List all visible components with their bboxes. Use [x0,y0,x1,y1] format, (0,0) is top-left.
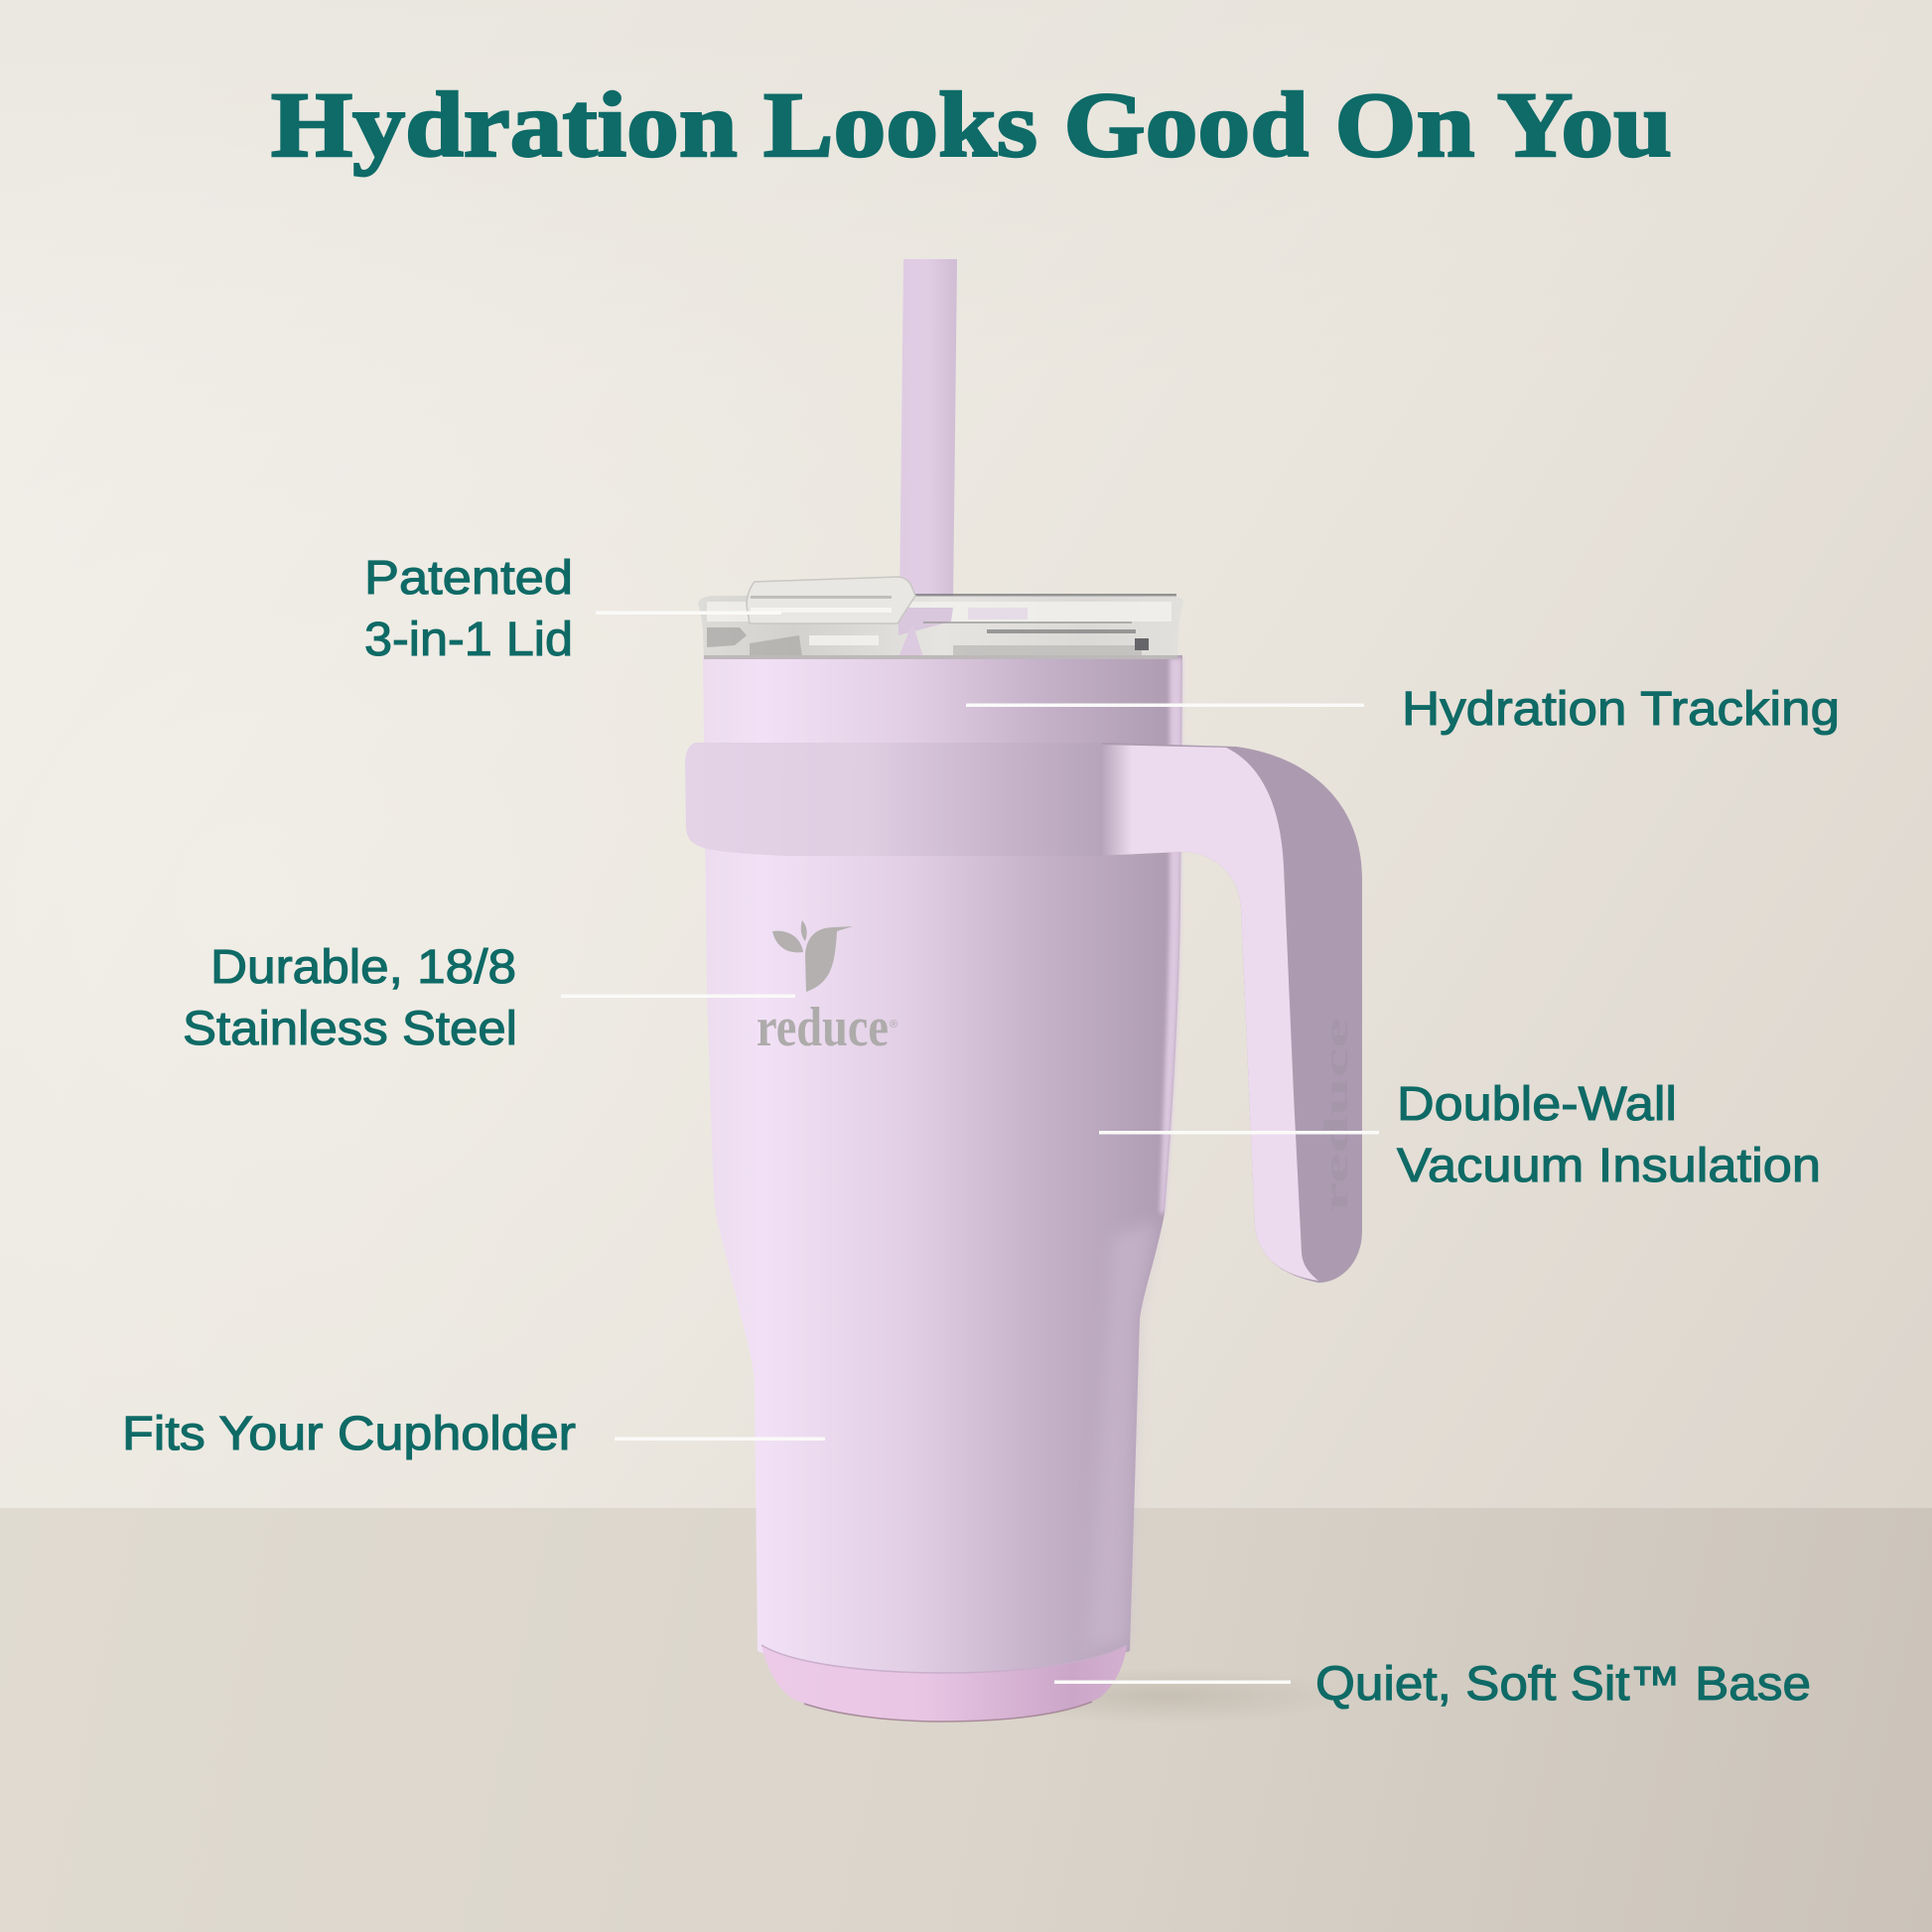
leader line [966,703,1364,707]
base seam [761,1645,1127,1673]
floor shadow [973,1668,1350,1724]
leader line [615,1438,825,1441]
straw [899,259,957,606]
leader line [1054,1680,1291,1684]
lid rim [698,596,1183,657]
handle embossed wordmark: reduce [1318,1018,1355,1212]
label text: Double-Wall [1397,1078,1677,1131]
glass lid [698,577,1183,659]
handle light face [1100,745,1318,1281]
lid dark reflections [707,627,747,647]
label text [183,941,517,1055]
label text: Quiet, Soft Sit™ Base [1315,1658,1811,1711]
handle dark side [1102,743,1362,1283]
base contact edge [804,1702,1092,1722]
label text: Patented [364,552,573,605]
label text: Durable, 18/8 [210,941,516,994]
callout: soft sit base [1054,1658,1811,1711]
tumbler [685,259,1362,1724]
right rim light [1160,658,1182,1213]
callout: vacuum insulation [1099,1078,1821,1192]
engraved logo [757,920,897,1058]
label text [364,552,573,666]
label text: Stainless Steel [183,1003,517,1055]
silicone base [761,1645,1127,1722]
label text: Vacuum Insulation [1397,1140,1821,1192]
lower right lightening [1087,1221,1157,1648]
callout: stainless steel [183,941,795,1055]
label text: Fits Your Cupholder [122,1408,576,1460]
callout: cupholder [122,1408,825,1460]
logo wordmark: reduce [757,997,889,1058]
title: Hydration Looks Good On You [271,74,1672,177]
handle [1100,743,1362,1283]
body silhouette [703,655,1182,1673]
registered mark: ® [890,1019,897,1031]
flip spout [747,577,915,623]
leader line [596,612,781,615]
logo leaf mark [772,920,853,992]
leader line [1099,1131,1379,1134]
background: table surface [0,1508,1932,1932]
label text: 3-in-1 Lid [364,614,573,666]
collar [685,743,1117,856]
leader line [561,995,795,998]
callout: patented lid [364,552,781,666]
label text: Hydration Tracking [1402,683,1840,736]
tumbler body [703,655,1182,1722]
callout: hydration tracking [966,683,1840,736]
label text [1397,1078,1821,1192]
